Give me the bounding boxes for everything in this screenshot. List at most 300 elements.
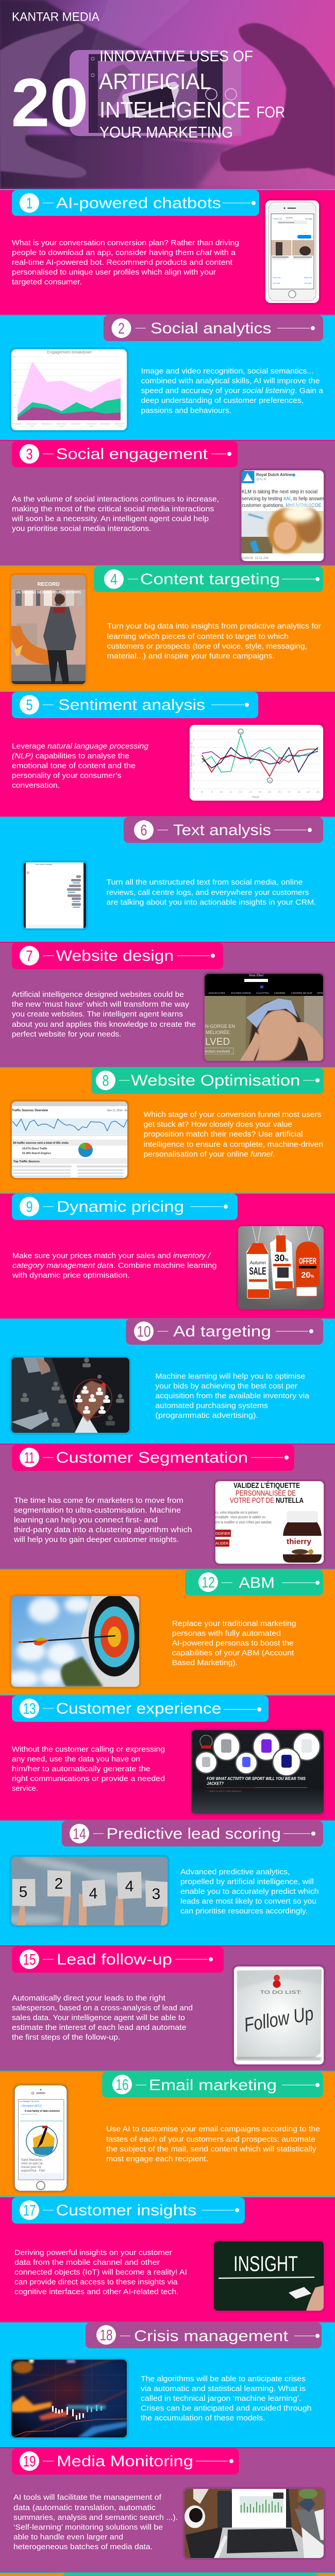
- heading: 20: [62, 2573, 319, 2576]
- chart: sentiment line chart: 11: [229, 791, 232, 794]
- text block: Image and video recognition, social semantics...: [141, 367, 314, 376]
- image: sale price tags: 20%: [301, 1271, 314, 1280]
- heading: 2: Social analytics: [150, 320, 271, 337]
- image: jacket product recommender: * * I WANT TO USE IT TO BE VERSATILE*: [207, 1790, 242, 1792]
- image: personalised Nutella label: ALIDER: [215, 1542, 228, 1546]
- heading: 17: Customer insights: [56, 2202, 196, 2219]
- chart: engagement breakdown area chart: 12H: [30, 425, 34, 428]
- chart: sentiment line chart: 14: [258, 791, 261, 794]
- panel: 7 Website design: [0, 942, 335, 1067]
- image: fashion website: Vous Êtes!: [249, 973, 264, 977]
- text block: [144, 1111, 323, 1159]
- smartphone held in hands: [70, 50, 241, 136]
- image: follow up sticky note: [232, 1964, 326, 2066]
- image: hands holding score cards: [0, 1853, 170, 1927]
- text block: any need, use the data you have on: [12, 1755, 140, 1764]
- heading: 9: 9: [26, 1198, 33, 1216]
- text block: you prioritise social media interactions.: [12, 525, 152, 533]
- panel: 11 Customer Segmentation: [0, 1444, 335, 1569]
- text block: AI tools will facilitate the management of: [13, 2494, 162, 2502]
- text block: The algorithms will be able to anticipate crises: [141, 2375, 306, 2383]
- heading: 17: [12, 2197, 245, 2224]
- text block: [106, 878, 316, 907]
- text block: category management data . Combine machine learning: [12, 1262, 216, 1270]
- heading: 17: 17: [23, 2202, 36, 2219]
- image: sale price tags: SALE: [249, 1266, 266, 1277]
- image: insight on chalkboard: INSIGHT: [233, 2251, 298, 2276]
- text block: can provide direct access to these insights via: [14, 2278, 178, 2286]
- image: KLM tweet: @KLM: [256, 478, 266, 481]
- image: personalised Nutella label: [213, 1479, 326, 1566]
- text block: material...) and inspire your future campaigns.: [107, 652, 275, 660]
- text block: called in technical jargon ‘machine learning’.: [141, 2395, 301, 2403]
- chart: sentiment line chart: 12: [239, 791, 242, 794]
- text block: The time has come for marketers to move from: [14, 1497, 183, 1505]
- image: fashion website: [203, 972, 325, 1063]
- image: arrow in archery target: [8, 1594, 141, 1689]
- right hand: [220, 23, 335, 176]
- text block: conversation.: [12, 782, 60, 790]
- image: insight on chalkboard: [212, 2239, 326, 2313]
- text block: Turn your big data into insights from predictive analytics for: [107, 622, 321, 631]
- chart: engagement breakdown area chart: 50: [13, 355, 16, 358]
- image: fashion website: SOUTIEN-GORGE: [231, 992, 251, 994]
- text block: passions and behaviours.: [141, 407, 231, 415]
- chart: sentiment line chart: [188, 723, 325, 803]
- image: fashion website: NOUVEAUTÉS: [209, 991, 225, 994]
- image: runner with wearable data: [9, 573, 88, 686]
- image: hands holding score cards: 4: [89, 1885, 97, 1902]
- panel: 10 Ad targeting: [0, 1318, 335, 1444]
- title: INNOVATIVE USES OF: [99, 48, 253, 65]
- panel: 2 Social analytics: [0, 314, 335, 440]
- panel: 13 Customer experience: [0, 1694, 335, 1821]
- image: phone with chatbot: Shop now: [304, 277, 312, 279]
- text block: connected objects (IoT) will become a reality! AI: [14, 2268, 187, 2277]
- image: web analytics dashboard: Top Traffic Sources: [13, 1160, 40, 1163]
- text block: most engage each recipient.: [106, 2155, 208, 2163]
- text block: [14, 2249, 187, 2296]
- chart: engagement breakdown area chart: 08/01/2017: [115, 422, 126, 425]
- image: hands holding score cards: 4: [125, 1878, 133, 1895]
- chart: sentiment line chart: 19: [307, 791, 310, 794]
- image: laptop with analytics on desk: [182, 2487, 326, 2560]
- image: follow up sticky note: Follow Up: [242, 2003, 315, 2036]
- image: sale price tags: [236, 1224, 326, 1311]
- text block: personas with fully automated: [172, 1630, 281, 1638]
- text block: the accumulation of these models.: [141, 2414, 265, 2422]
- panel: 8 Website Optimisation: [0, 1067, 335, 1193]
- image: fashion website: LINGERIE: [274, 992, 285, 994]
- panel: 15 Lead follow-up: [0, 1945, 335, 2071]
- text block: third-party data into a clustering algorithm which: [14, 1526, 192, 1534]
- heading: 6: Text analysis: [173, 822, 271, 839]
- image: web analytics dashboard: 53.18% Search Engines: [22, 1152, 51, 1155]
- text block: speed and accuracy of your social listening . Gain a: [141, 387, 324, 395]
- text block: AI-powered personas to boost the: [172, 1639, 294, 1648]
- panel: 4 Content targeting: [0, 565, 335, 691]
- image: fashion website: ection evolved: [205, 1049, 230, 1054]
- chart: engagement breakdown area chart: 20: [13, 394, 16, 396]
- image: email on smartphone: [12, 2083, 69, 2193]
- heading: 13: [12, 1696, 269, 1722]
- chart: engagement breakdown area chart: 06/01/2017: [57, 422, 68, 425]
- image: KLM tweet: customer questions. klmf.ly/2du1COE: [242, 502, 322, 509]
- image: email on smartphone: Salut Marianne,: [21, 2159, 43, 2162]
- image: email on smartphone: Aujourd’hui à 07:04: [21, 2113, 37, 2115]
- image: hands holding score cards: 3: [152, 1886, 160, 1903]
- heading: 12: [185, 1570, 323, 1596]
- chart: engagement breakdown area chart: 10: [13, 406, 16, 409]
- text block: personality of your consumer’s: [12, 772, 122, 780]
- chart: sentiment line chart: 16: [278, 791, 281, 794]
- text block: personalisation of your online funnel.: [144, 1150, 275, 1159]
- text block: [11, 496, 219, 533]
- heading: 10: Ad targeting: [173, 1323, 271, 1340]
- text block: can prioritise resources accordingly.: [180, 1907, 308, 1916]
- heading: 19: [12, 2448, 239, 2475]
- heading: 12: 12: [202, 1574, 214, 1591]
- image: fashion website: LVED: [205, 1037, 230, 1047]
- image: businessman selecting target audience: [9, 1355, 131, 1435]
- text block: ‘Self-learning’ monitoring solutions will be: [13, 2523, 163, 2532]
- heading: 3: 3: [26, 446, 33, 463]
- heading: 19: Media Monitoring: [57, 2453, 193, 2470]
- image: KLM tweet: [239, 468, 326, 563]
- text block: As the volume of social interactions continues to increase,: [12, 496, 219, 504]
- image: personalised Nutella label: PERSONNALISÉE DE: [236, 1489, 296, 1498]
- panel: 14 Predictive lead scoring: [0, 1820, 335, 1945]
- text block: perfect website for your needs.: [12, 1030, 122, 1039]
- big number 20: 20: [11, 65, 88, 141]
- image: web analytics dashboard: 19.67% Direct Traffic: [22, 1147, 47, 1150]
- text block: the new ‘must have’ which will transform the way: [12, 1001, 190, 1009]
- chart: sentiment line chart: 2: [193, 771, 195, 774]
- chart: sentiment line chart: 10: [220, 791, 223, 794]
- chart: sentiment line chart: 8: [202, 791, 203, 794]
- chart: engagement breakdown area chart: 06/01/2017: [42, 422, 53, 425]
- heading: 11: 11: [24, 1450, 35, 1466]
- image: email on smartphone: ‹ Réception (8211): [21, 2105, 42, 2108]
- text block: automated purchasing systems: [155, 1402, 268, 1410]
- image: jacket product recommender: JACKET?: [207, 1781, 224, 1786]
- chart: sentiment line chart: 15: [268, 791, 271, 794]
- text block: service.: [12, 1785, 38, 1793]
- chart: engagement breakdown area chart: [9, 347, 129, 432]
- chart: engagement breakdown area chart: 40: [13, 368, 16, 371]
- heading: 5: Sentiment analysis: [58, 697, 205, 714]
- text block: [106, 2125, 320, 2163]
- text block: Advanced predictive analytics,: [180, 1868, 290, 1876]
- text block: estimate the interest of each lead and automate: [12, 2024, 187, 2032]
- text block: Leverage natural language processing: [12, 742, 148, 751]
- text block: What is your conversation conversion plan? Rather than driving: [12, 239, 239, 247]
- heading: 16: Email marketing: [149, 2077, 277, 2094]
- text block: acquisition from the available inventory via: [155, 1392, 310, 1400]
- image: phone with chatbot: Live chat: [304, 282, 311, 284]
- text block: him/her to automatically generate the: [12, 1765, 150, 1773]
- chart: sentiment line chart: 6: [193, 738, 195, 741]
- text block: [12, 991, 196, 1039]
- text block: [141, 2375, 311, 2422]
- chart: engagement breakdown area chart: 07/01/2017: [86, 422, 97, 425]
- image: email on smartphone: aujourd’hui - Flint: [21, 2170, 45, 2173]
- text block: making the most of the critical social media interactions: [12, 505, 214, 514]
- chart: engagement breakdown area chart: 05/01/2017: [27, 422, 38, 425]
- text block: leads are most likely to convert so you: [180, 1897, 316, 1906]
- chart: sentiment line chart: 9: [211, 791, 213, 794]
- heading: 18: 18: [100, 2327, 112, 2344]
- heading: 5: [12, 692, 258, 718]
- image: personalised Nutella label: thierry: [287, 1537, 312, 1546]
- text block: tastes of each of your customers and prospects: automate: [106, 2136, 315, 2144]
- image: phone with chatbot: Manage: [305, 217, 313, 220]
- image: fashion website: N-GORGE EN: [205, 1024, 235, 1029]
- chart: sentiment line chart: 17: [288, 791, 291, 794]
- text block: [13, 1497, 192, 1544]
- text block: [13, 2494, 178, 2551]
- text block: data from the mobile channel and other: [14, 2259, 160, 2267]
- text block: [155, 1372, 310, 1420]
- image: web analytics dashboard: Nov 11, 2010 - Dec 11: [107, 1109, 133, 1112]
- text block: learning which pieces of content to target to which: [107, 633, 289, 641]
- chart: engagement breakdown area chart: 07/01/2017: [71, 422, 82, 425]
- chart: sentiment line chart: 3: [193, 763, 195, 766]
- text block: (programmatic advertising).: [155, 1412, 258, 1420]
- text block: Automatically direct your leads to the right: [12, 1994, 165, 2003]
- text block: deep understanding of customer preferences,: [141, 397, 304, 405]
- image: fashion website: VÊTE: [317, 991, 323, 994]
- chart: engagement breakdown area chart: 05/01/2017: [12, 422, 23, 425]
- image: KLM tweet: Royal Dutch Airlines: [256, 472, 295, 477]
- text block: salesperson, based on a cross-analysis of lead and: [12, 2004, 193, 2012]
- text block: [12, 239, 239, 286]
- title: YOUR MARKETING: [99, 123, 233, 141]
- heading: 16: [102, 2072, 323, 2097]
- text block: [12, 1745, 165, 1793]
- heading: 11: Customer Segmentation: [56, 1449, 248, 1466]
- text block: data (automatic translation, automatic: [13, 2504, 156, 2512]
- text block: Replace your traditional marketing: [172, 1620, 296, 1628]
- text block: (NLP) capabilities to analyse the: [12, 752, 129, 760]
- image: fashion website: CULOTTES: [256, 992, 269, 994]
- image: personalised Nutella label: onnalisée. Vous pouvez la valider ou: [215, 1516, 265, 1519]
- text block: [107, 622, 321, 660]
- image: email on smartphone: A new family of data commons: [25, 2110, 60, 2113]
- heading: 5: 5: [26, 697, 33, 714]
- heading: 8: [92, 1067, 324, 1094]
- chart: sentiment line chart: 5: [193, 747, 195, 750]
- image: hands holding score cards: 2: [55, 1875, 63, 1892]
- text block: Without the customer calling or expressing: [12, 1745, 165, 1754]
- image: personalised Nutella label: VALIDEZ L’ÉTIQUETTE: [233, 1481, 300, 1490]
- image: email on smartphone: ••••• Orange F 4G 16:23: [20, 2100, 39, 2103]
- chart: sentiment line chart: 0: [193, 788, 195, 791]
- heading: 6: 6: [140, 822, 147, 839]
- heading: 1: [12, 190, 259, 216]
- text block: intelligence to ensure a complete, machine-driven: [144, 1141, 323, 1149]
- text block: [12, 1252, 216, 1280]
- text block: summaries, analysis and semantic search ...).: [13, 2514, 178, 2522]
- image: personalised Nutella label: ro, votre étiquette est à présent: [215, 1511, 258, 1515]
- chart: engagement breakdown area chart: 0: [14, 419, 15, 421]
- chart: sentiment line chart: Hour: [252, 795, 260, 799]
- text block: Make sure your prices match your sales and inventory /: [12, 1252, 211, 1260]
- image: web analytics dashboard: All traffic sources sent a total of 361 visits: [13, 1142, 69, 1145]
- image: phone with chatbot: ‹ Home (5): [272, 217, 282, 220]
- text block: Based Marketing).: [172, 1659, 238, 1667]
- heading: 4: 4: [110, 571, 118, 588]
- heading: 14: 14: [73, 1826, 86, 1842]
- text block: heterogeneous batches of media data.: [13, 2543, 153, 2551]
- heading: 15: Lead follow-up: [57, 1951, 172, 1968]
- text block: emotional tone of content and the: [12, 762, 136, 770]
- title: INTELLIGENCE: [99, 97, 250, 123]
- heading: 15: [12, 1946, 224, 1973]
- text block: customers or prospects (tone of voice, style, messaging,: [107, 642, 307, 651]
- text block: right communications or provide a needed: [12, 1775, 165, 1783]
- heading: 4: Content targeting: [140, 571, 280, 588]
- heading: 8: Website Optimisation: [131, 1072, 300, 1089]
- image: phone with chatbot: Live chat: [273, 282, 280, 284]
- image: hands holding score cards: 5: [19, 1884, 27, 1901]
- panel: 9 Dynamic pricing: [0, 1193, 335, 1318]
- text block: targeted consumer.: [12, 278, 82, 286]
- image: phone with chatbot: Burberry: [286, 217, 293, 219]
- heading: 18: [86, 2323, 322, 2348]
- text block: Turn all the unstructured text from social media, online: [106, 878, 303, 887]
- image: jacket product recommender: [189, 1728, 326, 1816]
- panel: 1 AI-powered chatbots: [0, 189, 335, 314]
- heading: 16: 16: [115, 2076, 129, 2094]
- text block: real-time AI-powered bot. Recommend products and content: [12, 259, 232, 267]
- text block: via automatic and statistical learning. What is: [141, 2385, 306, 2393]
- text block: personalised to unique user profiles which align with your: [12, 268, 216, 277]
- text block: able to handle even larger and: [13, 2533, 123, 2541]
- panel: 6 Text analysis: [0, 816, 335, 942]
- chart: sentiment line chart: 20: [316, 791, 320, 794]
- chart: sentiment line chart: Level of Sentiment ( 1 to 5): [190, 742, 193, 779]
- image: sale price tags: Autumn: [249, 1260, 266, 1265]
- heading: 12: ABM: [239, 1574, 275, 1591]
- chart: sentiment line chart: 13: [249, 791, 252, 794]
- chart: engagement breakdown area chart: 08/01/2017: [100, 422, 111, 425]
- text block: get stuck at? How closely does your value: [144, 1121, 292, 1129]
- heading: 19: 19: [23, 2453, 36, 2470]
- image: financial candlestick chart: [9, 2354, 129, 2445]
- text block: Deriving powerful insights on your customer: [14, 2249, 172, 2257]
- text block: about you and applies this knowledge to create the: [12, 1021, 196, 1029]
- heading: 9: Dynamic pricing: [57, 1198, 184, 1215]
- text block: Artificial intelligence designed websites could be: [12, 991, 184, 999]
- heading: 2: 2: [118, 320, 125, 337]
- text block: reviews, call centre logs, and everywhere your customers: [106, 889, 309, 897]
- text block: capabilities of your ABM (Account: [172, 1649, 294, 1657]
- panel: 12 ABM: [0, 1569, 335, 1694]
- panel: 5 Sentiment analysis: [0, 691, 335, 816]
- panel: 18 Crisis management: [0, 2321, 335, 2447]
- chart: sentiment line chart: 4: [193, 755, 195, 758]
- heading: 14: Predictive lead scoring: [106, 1825, 281, 1842]
- chart: sentiment line chart: 18: [297, 791, 300, 794]
- text block: you create websites. The intelligent agent learns: [12, 1010, 183, 1019]
- heading: 2: [104, 315, 323, 341]
- text block: people to download an app, consider having them chat with a: [12, 249, 236, 257]
- text block: proposition match their needs? Use artificial: [144, 1130, 303, 1139]
- panel: 19 Media Monitoring: [0, 2447, 335, 2572]
- text block: propelled by artificial intelligence, will: [180, 1878, 314, 1886]
- heading: 11: [12, 1445, 294, 1471]
- image: KLM tweet: 9/30/16, 11:11 AM: [242, 556, 269, 560]
- image: phone with chatbot: Shop now: [273, 277, 281, 279]
- chart: sentiment line chart: 7: [193, 730, 195, 733]
- heading: 9: [12, 1194, 238, 1220]
- image: chat conversation on phone: Push Notice Manager: [35, 863, 53, 866]
- image: email on smartphone: trouvé pour toi: [21, 2166, 41, 2169]
- heading: 18: Crisis management: [134, 2328, 289, 2345]
- text block: combined with analytical skills, AI will improve the: [141, 377, 320, 385]
- image: runner with wearable data: UN TABLEAU DE BORD POUR TON CORPS: [16, 591, 81, 595]
- image: personalised Nutella label: ore la modifier si vous n’êtes pas satisfait.: [215, 1521, 272, 1524]
- chart: sentiment line chart: 1: [193, 779, 195, 783]
- chart: engagement breakdown area chart: 12H: [89, 425, 93, 428]
- text block: with dynamic price optimisation.: [12, 1272, 130, 1280]
- title: FOR: [257, 103, 285, 121]
- text block: [180, 1868, 319, 1916]
- heading: 1: AI-powered chatbots: [56, 195, 221, 212]
- heading: 4: [94, 566, 323, 592]
- heading: 10: 10: [137, 1323, 150, 1341]
- text block: enable you to accurately predict which: [180, 1888, 319, 1896]
- chart: engagement breakdown area chart: 12H: [60, 425, 64, 428]
- text block: Crises can be anticipated and avoided through: [141, 2404, 311, 2413]
- text block: Machine learning will help you to optimise: [155, 1372, 305, 1381]
- hero photo background: [0, 0, 335, 189]
- text block: segmentation to ultra-customisation. Machine: [14, 1506, 181, 1515]
- heading: 3: Social engagement: [56, 446, 208, 463]
- heading: 14: [62, 1821, 323, 1846]
- text block: the subject of the mail, send content which will statistically: [106, 2145, 316, 2154]
- image: runner with wearable data: RECORD: [37, 582, 60, 587]
- image: web analytics dashboard: [10, 1099, 133, 1180]
- text block: your bids by achieving the best cost per: [155, 1382, 297, 1391]
- image: web analytics dashboard: Traffic Sources Overview: [12, 1109, 48, 1112]
- heading: 6: [124, 817, 323, 843]
- text block: learning can help you connect first- and: [14, 1516, 158, 1524]
- heading: 7: Website design: [56, 947, 174, 964]
- title: [99, 48, 285, 141]
- chart: engagement breakdown area chart: 30: [13, 381, 16, 383]
- image: personalised Nutella label: VOTRE POT DE NUTELLA: [230, 1496, 304, 1505]
- text block: will soon be a necessity. An intelligent agent could help: [11, 515, 209, 523]
- text block: are talking about you into actionable insights in your CRM.: [106, 899, 316, 907]
- panel: 3 Social engagement: [0, 440, 335, 565]
- image: fashion website: LINGERIE DE NUIT: [291, 992, 312, 994]
- image: sale price tags: 30%: [274, 1253, 289, 1263]
- image: personalised Nutella label: ODIFIER: [215, 1532, 230, 1536]
- text block: sales data. Your intelligence agent will be able to: [12, 2014, 185, 2022]
- image: phone with chatbot: shop the look below: [278, 222, 294, 224]
- heading: 7: [12, 943, 223, 969]
- image: KLM tweet: servicing by testing #AI, to help answer: [242, 496, 324, 502]
- heading: 8: 8: [102, 1073, 109, 1089]
- panel: 17 Customer insights: [0, 2196, 335, 2321]
- heading: 1: 1: [26, 195, 33, 212]
- text block: will help you to gain deeper customer insights.: [13, 1536, 179, 1544]
- image: KLM tweet: KLM is taking the next step in social: [242, 489, 317, 495]
- image: chat conversation on phone: [22, 860, 88, 930]
- text block: [172, 1620, 296, 1667]
